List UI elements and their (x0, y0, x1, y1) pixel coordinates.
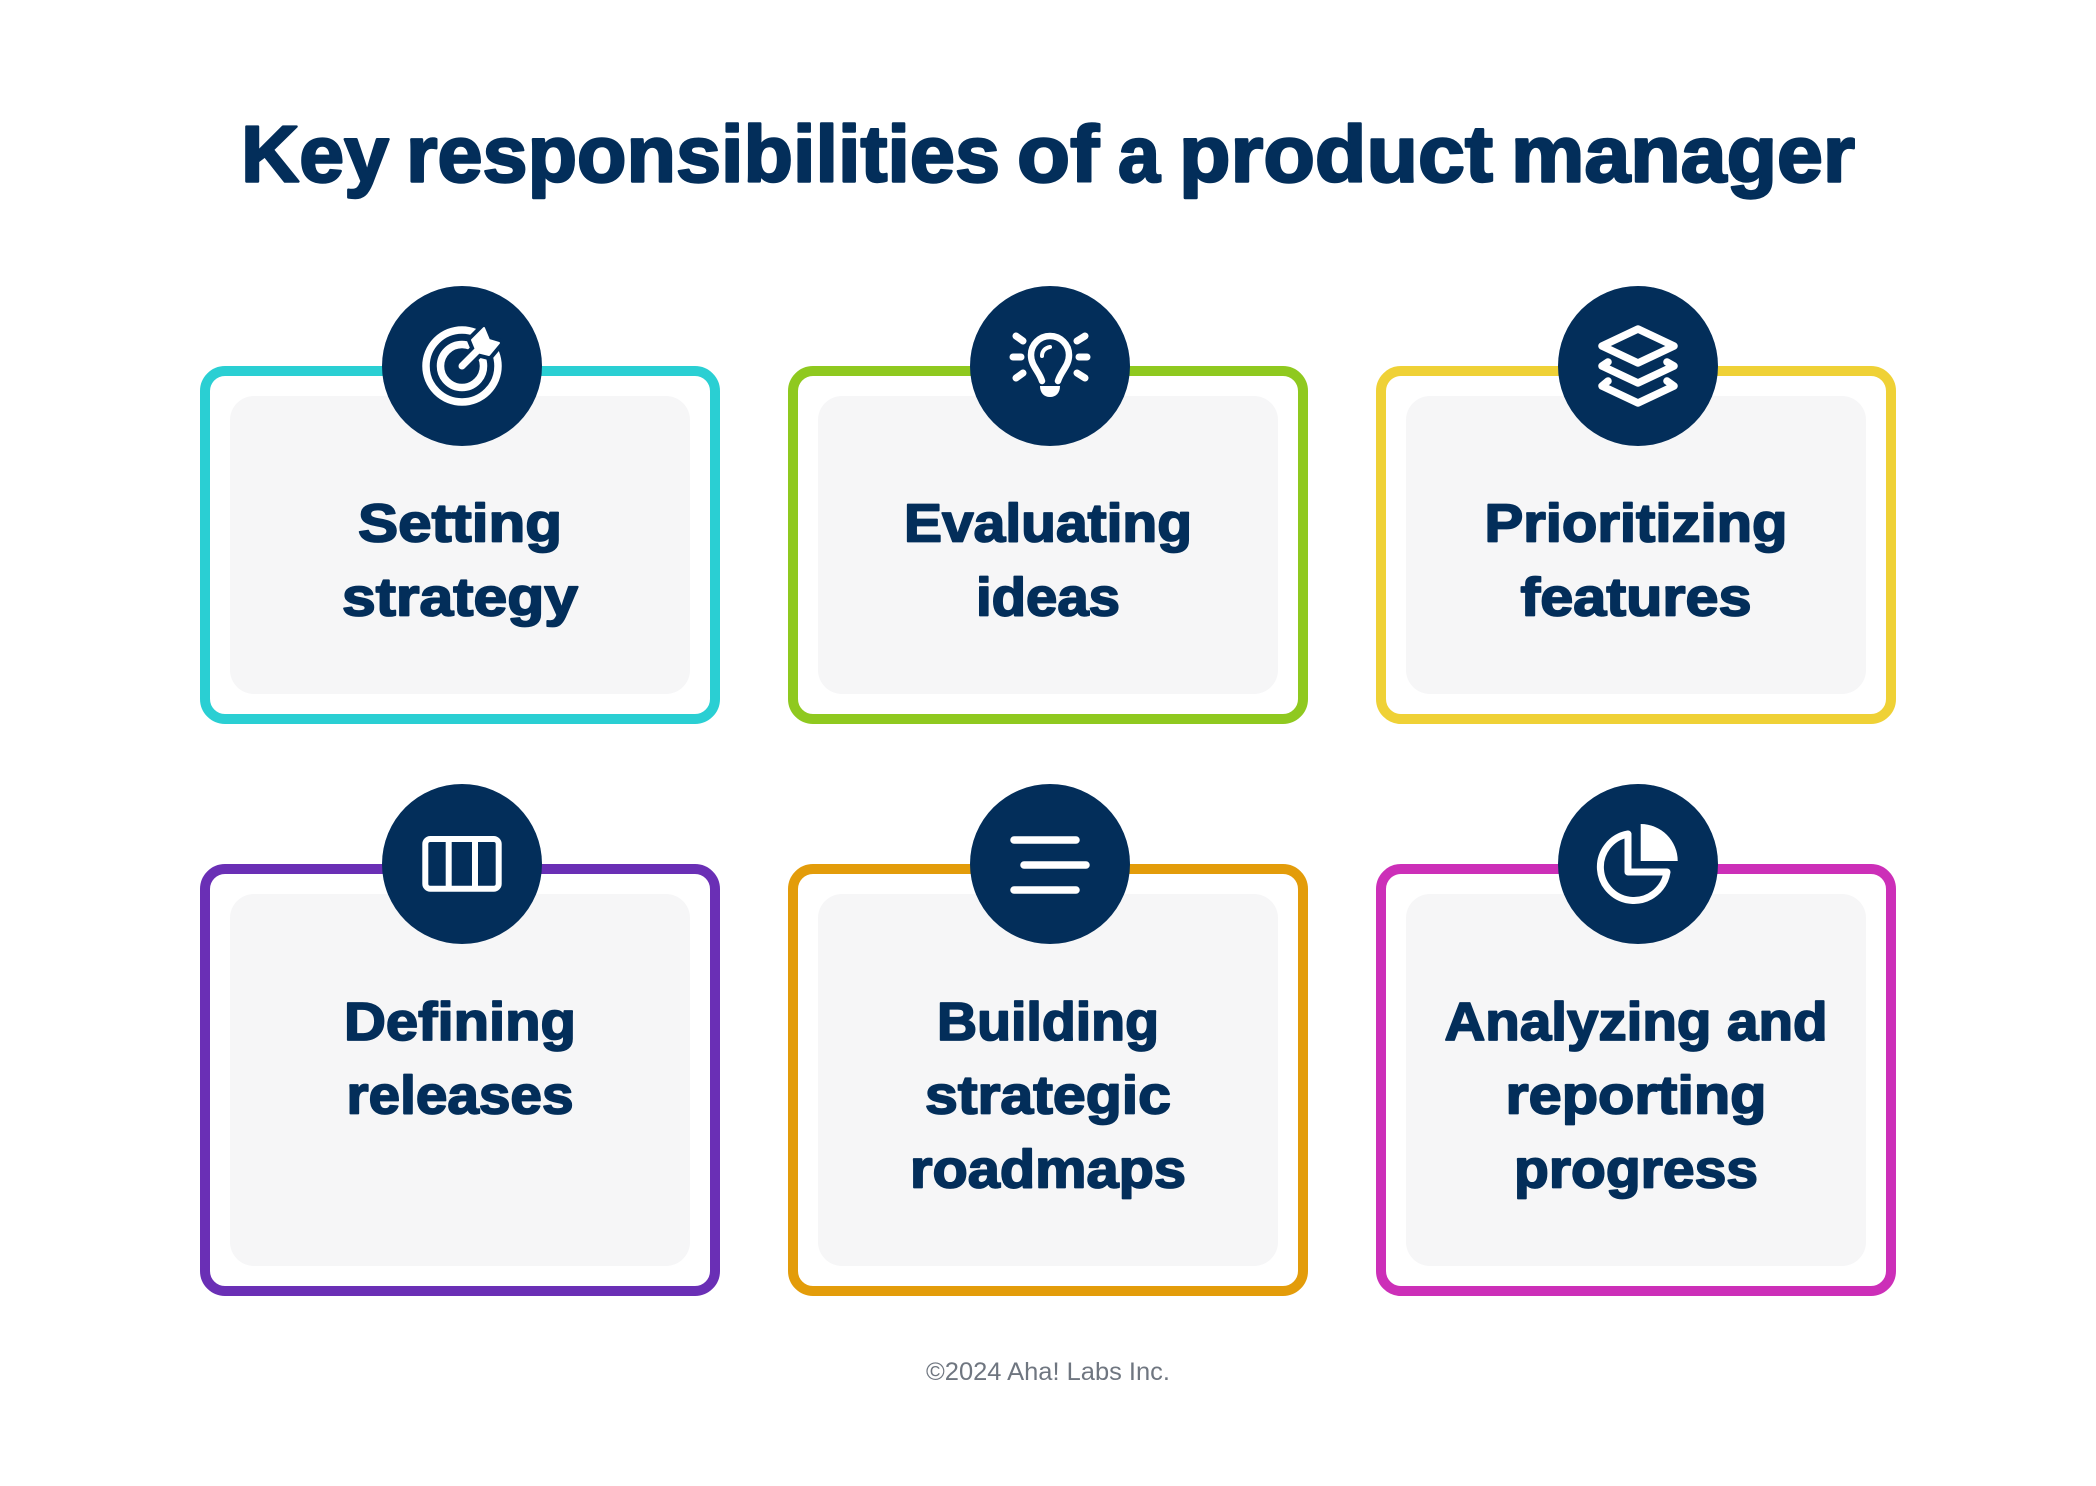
card label: Analyzing and (1444, 992, 1828, 1052)
title: product (1179, 110, 1493, 198)
card inner panel (818, 894, 1278, 1266)
card border: teal (205, 371, 715, 719)
card inner panel (230, 894, 690, 1266)
icon badge (1558, 784, 1718, 944)
card label: strategy (342, 568, 578, 628)
icon: release columns (425, 839, 499, 889)
card inner panel (1406, 396, 1866, 694)
card label (344, 992, 576, 1126)
title: a (1118, 110, 1160, 198)
card label: roadmaps (910, 1140, 1186, 1200)
card border: yellow (1381, 371, 1891, 719)
title: Key (241, 110, 390, 198)
panel: evaluating ideas (793, 286, 1303, 719)
panel: setting strategy (205, 286, 715, 719)
card label: Defining (344, 992, 576, 1052)
icon: stacked layers (1602, 329, 1674, 403)
card label: reporting (1506, 1066, 1766, 1126)
card label (910, 992, 1186, 1200)
card label (904, 494, 1192, 628)
panel: building strategic roadmaps (793, 784, 1303, 1291)
panel: defining releases (205, 784, 715, 1291)
icon badge (970, 784, 1130, 944)
icon: target with dart (426, 328, 499, 402)
title: of (1017, 110, 1099, 198)
card label: progress (1514, 1140, 1758, 1200)
card label (1444, 992, 1828, 1200)
card label: Building (937, 992, 1159, 1052)
card label (342, 494, 578, 628)
icon badge (1558, 286, 1718, 446)
panel: analyzing and reporting progress (1381, 784, 1891, 1291)
title (241, 110, 1855, 198)
icon: roadmap lines (1014, 840, 1086, 890)
icon badge (970, 286, 1130, 446)
card label: Prioritizing (1484, 494, 1788, 554)
title: responsibilities (406, 110, 1000, 198)
icon badge (382, 286, 542, 446)
card label: Setting (358, 494, 562, 554)
card label: Evaluating (904, 494, 1192, 554)
panel: prioritizing features (1381, 286, 1891, 719)
card inner panel (1406, 894, 1866, 1266)
card border: purple (205, 869, 715, 1291)
card label (1484, 494, 1788, 628)
card inner panel (818, 396, 1278, 694)
card border: magenta (1381, 869, 1891, 1291)
card label: releases (346, 1066, 574, 1126)
icon badge (382, 784, 542, 944)
card inner panel (230, 396, 690, 694)
card border: orange (793, 869, 1303, 1291)
icon: light bulb (1013, 336, 1087, 397)
footer copyright: ©2024 Aha! Labs Inc. (926, 1358, 1170, 1386)
card label: strategic (925, 1066, 1171, 1126)
card label: ideas (976, 568, 1120, 628)
title: manager (1511, 110, 1855, 198)
icon: pie chart (1600, 824, 1678, 900)
card label: features (1520, 568, 1752, 628)
card border: green (793, 371, 1303, 719)
